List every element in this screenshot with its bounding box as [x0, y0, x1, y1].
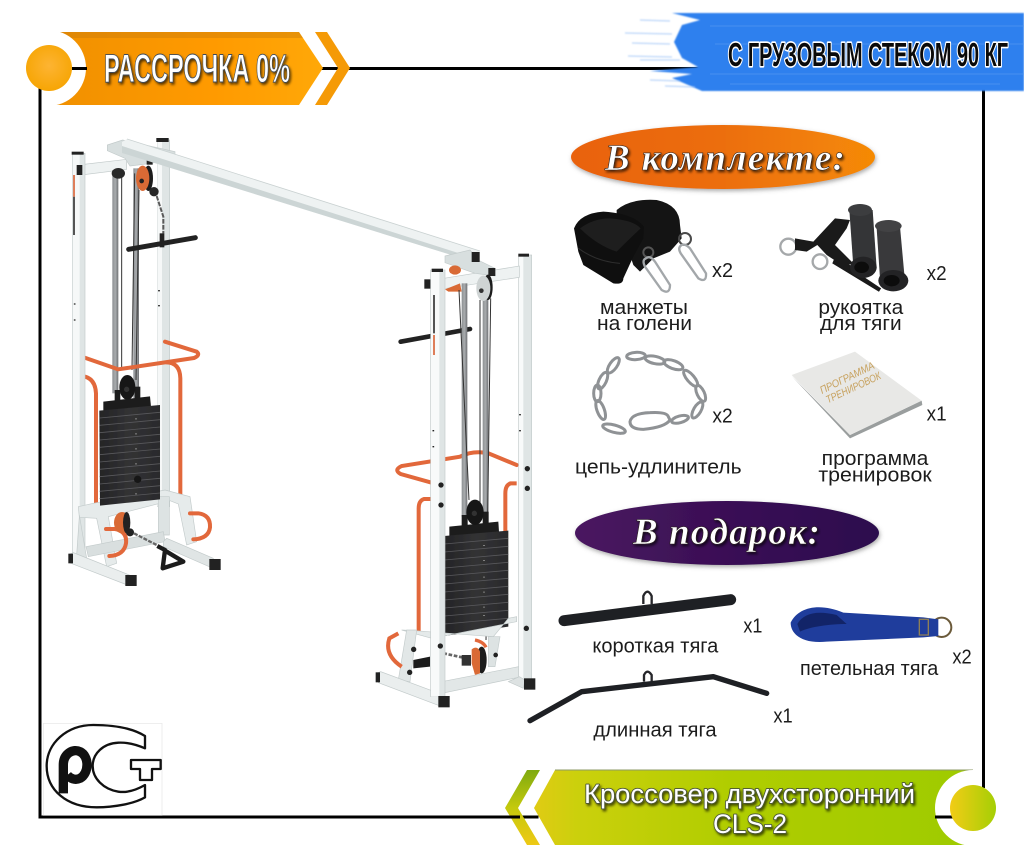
- banner text: model: CLS-2: [713, 809, 787, 839]
- item: extension chain: x2: [712, 405, 733, 427]
- item: loop strap: [791, 607, 972, 680]
- label: programme: тренировок: [818, 465, 932, 487]
- heading: included: В комплекте:: [604, 138, 845, 179]
- icon: extension chain: [594, 352, 708, 435]
- item: short bar: короткая тяга: [592, 636, 719, 658]
- item: loop strap: x2: [952, 646, 972, 668]
- label: handle: для тяги: [820, 313, 902, 335]
- banner: weight stack: [625, 13, 1024, 91]
- icon: book: [792, 352, 922, 438]
- item: training programme: x1: [927, 404, 947, 426]
- label: handle: [818, 297, 904, 335]
- banner text: product title: Кроссовер двухсторонний: [584, 779, 915, 809]
- icon: book: ПРОГРАММА: [818, 360, 877, 397]
- item: short bar: [564, 592, 762, 658]
- icon: loop strap: [791, 607, 951, 642]
- item: pull handle: x2: [927, 263, 947, 285]
- icon: book: ТРЕНИРОВОК: [824, 370, 884, 406]
- illustration: right cable tower: [376, 250, 535, 707]
- illustration: overhead connecting beam: [122, 139, 480, 262]
- label: handle: рукоятка: [818, 297, 904, 319]
- heading: as a gift: В подарок:: [632, 512, 820, 553]
- banner: product name: [505, 760, 1011, 846]
- item: training programme: [792, 352, 947, 487]
- label: programme: [818, 448, 932, 487]
- label: programme: программа: [822, 448, 929, 470]
- label: cuffs: на голени: [597, 313, 692, 335]
- illustration: left cable tower: [68, 138, 221, 586]
- icon: ankle cuffs: [574, 200, 706, 292]
- item: long bar: x1: [773, 706, 793, 728]
- label: chain: цепь-удлинитель: [575, 456, 742, 478]
- label: cuffs: манжеты: [600, 297, 688, 319]
- count: cuffs: x2: [712, 260, 733, 282]
- item: short bar: x1: [743, 616, 762, 638]
- item: long bar: [530, 672, 793, 742]
- icon: pull handle: [780, 204, 908, 291]
- item: ankle cuffs: [574, 200, 733, 335]
- label: cuffs: [597, 297, 692, 335]
- heading: included: [571, 125, 875, 189]
- logo: PCT certification mark: [43, 723, 162, 815]
- banner: installment offer: [10, 30, 350, 108]
- item: loop strap: петельная тяга: [800, 658, 939, 680]
- banner text: rassrochka: РАССРОЧКА 0%: [104, 47, 290, 91]
- heading: as a gift: [575, 501, 879, 565]
- item: extension chain: [575, 352, 742, 478]
- item: long bar: длинная тяга: [593, 720, 718, 742]
- icon: short bar: [564, 592, 731, 621]
- item: pull handle: [780, 204, 947, 335]
- icon: long bar: [530, 672, 767, 721]
